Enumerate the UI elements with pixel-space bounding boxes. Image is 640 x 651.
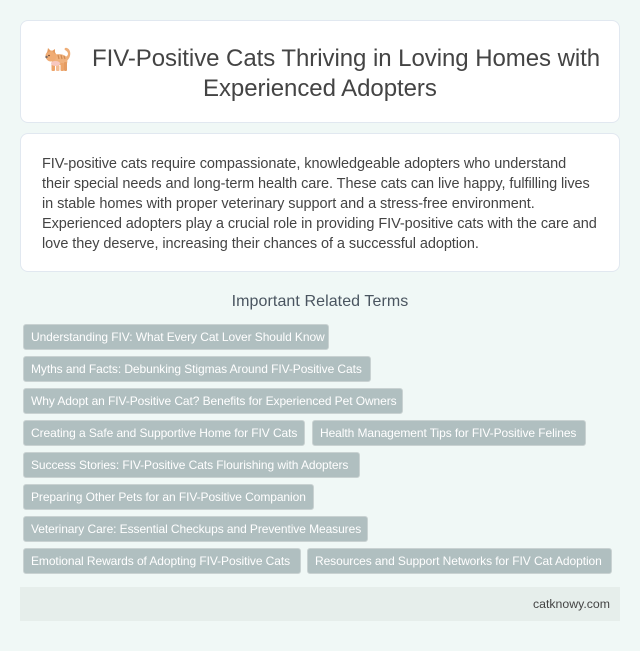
panel: description text bbox=[20, 133, 620, 272]
tag: Resources and Support Networks for FIV Cat Adoption bbox=[315, 554, 602, 568]
panel: description text: in stable homes with proper veterinary support and a stress-free environment. bbox=[42, 196, 535, 212]
tag bbox=[23, 548, 301, 574]
footer bbox=[20, 587, 620, 621]
tag: Health Management Tips for FIV-Positive Felines bbox=[320, 426, 576, 440]
tag: Success Stories: FIV-Positive Cats Flourishing with Adopters bbox=[31, 458, 348, 472]
tag bbox=[23, 452, 360, 478]
tag: Understanding FIV: What Every Cat Lover Should Know bbox=[31, 330, 325, 344]
panel: description text: Experienced adopters play a crucial role in providing FIV-positive cats with the care and bbox=[42, 216, 597, 232]
tag bbox=[23, 388, 403, 414]
tag: Veterinary Care: Essential Checkups and Preventive Measures bbox=[31, 522, 361, 536]
tag bbox=[307, 548, 612, 574]
tag: Creating a Safe and Supportive Home for FIV Cats bbox=[31, 426, 297, 440]
panel: description text: love they deserve, increasing their chances of a successful adoption. bbox=[42, 236, 479, 252]
title bbox=[92, 45, 600, 102]
tag: Why Adopt an FIV-Positive Cat? Benefits for Experienced Pet Owners bbox=[31, 394, 397, 408]
tag bbox=[23, 516, 368, 542]
title: Experienced Adopters bbox=[203, 75, 437, 102]
footer: site name: catknowy.com bbox=[533, 597, 610, 611]
panel: description text: FIV-positive cats require compassionate, knowledgeable adopters who understand bbox=[42, 156, 566, 172]
list: related term tags bbox=[23, 324, 612, 574]
tag bbox=[23, 420, 305, 446]
tag: Myths and Facts: Debunking Stigmas Around FIV-Positive Cats bbox=[31, 362, 362, 376]
title: FIV-Positive Cats Thriving in Loving Homes with bbox=[92, 45, 600, 72]
tag bbox=[312, 420, 586, 446]
tag bbox=[23, 356, 371, 382]
tag: Preparing Other Pets for an FIV-Positive Companion bbox=[31, 490, 306, 504]
panel: description text: their special needs and long-term health care. These cats can live happy, fulfilling lives bbox=[42, 176, 590, 192]
tag: Emotional Rewards of Adopting FIV-Positive Cats bbox=[31, 554, 290, 568]
panel: title card bbox=[20, 20, 620, 123]
icon: cat bbox=[45, 48, 70, 71]
tag bbox=[23, 324, 329, 350]
heading: related terms: Important Related Terms bbox=[232, 293, 408, 310]
tag bbox=[23, 484, 314, 510]
